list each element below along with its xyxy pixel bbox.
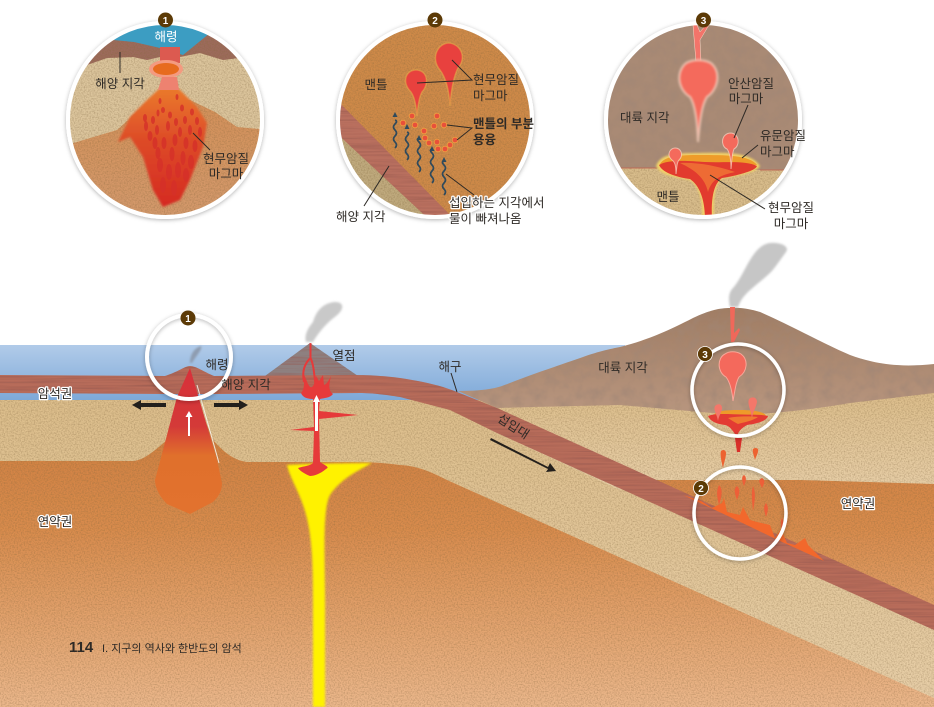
oceanic mantle: [342, 138, 424, 214]
oceanic crust leader: [119, 52, 121, 73]
basaltic leader: [710, 175, 765, 209]
small drops: [714, 397, 757, 421]
small drop: [406, 70, 427, 116]
water leader: [446, 174, 474, 195]
badge 1: 1: [163, 16, 169, 27]
plume: [118, 88, 207, 207]
crust boundary: [620, 168, 805, 170]
label: ridge: 해령: [154, 30, 178, 44]
label: partial melting of mantle: 맨틀의 부분: [473, 117, 534, 131]
badge 3: [696, 12, 711, 28]
vent and forks: [303, 343, 316, 388]
large drop: [719, 352, 746, 401]
badge 2: [428, 12, 442, 28]
hot spot yellow plume: [287, 463, 372, 707]
badge 2: 2: [432, 16, 438, 27]
label: ridge: 해령: [205, 358, 229, 372]
ring: [338, 23, 532, 217]
oceanic crust: [0, 366, 934, 630]
label: basaltic magma: 마그마: [209, 167, 244, 181]
andesitic leader: [734, 105, 748, 138]
label: basaltic magma: 현무암질: [473, 73, 519, 87]
label: oceanic crust: 해양 지각: [336, 210, 386, 224]
badge 3: 3: [702, 350, 708, 361]
label: basaltic magma: 현무암질: [768, 201, 814, 215]
neck, sills and base: [290, 398, 358, 476]
inset ring 3: [692, 344, 784, 436]
label: asthenosphere right: 연약권: [841, 496, 875, 511]
basaltic drops: [406, 43, 462, 116]
partial melt dots: [400, 113, 458, 152]
panel: plate tectonic cross-section: [0, 243, 934, 707]
inset circle 3 magma: [708, 352, 768, 452]
large drop: [435, 43, 462, 106]
rhyolite magma: [660, 155, 757, 165]
mantle: [622, 168, 784, 215]
label: continental crust: 대륙 지각: [620, 111, 670, 125]
badge 3: [698, 346, 712, 362]
inset 1 artwork: [70, 25, 260, 215]
basaltic magma leaders: [417, 60, 472, 83]
inset ring 2: [694, 467, 786, 559]
oceanic lithosphere mantle: [0, 385, 934, 698]
asthenosphere: [73, 100, 260, 215]
label: basaltic magma: 마그마: [774, 217, 809, 231]
inset 3 artwork: [608, 25, 798, 215]
label: andesitic magma: 마그마: [729, 92, 764, 106]
label: hot spot: 열점: [332, 349, 356, 363]
label: trench: 해구: [438, 360, 462, 374]
badge 1: [180, 310, 196, 326]
white arrow: ridge upwelling: [186, 411, 192, 436]
inset ring 1: [147, 315, 231, 399]
inset 2 artwork: [340, 25, 530, 215]
basaltic magma leader: [193, 133, 210, 150]
ridge smoke: [190, 346, 201, 363]
label: basaltic magma: 현무암질: [203, 152, 249, 166]
label: asthenosphere left: 연약권: [38, 514, 72, 529]
white arrow: hot spot upwelling: [313, 395, 320, 431]
water arrows: [392, 112, 446, 195]
ring: [68, 23, 262, 217]
label: mantle: 맨틀: [364, 78, 388, 92]
branching head: [301, 372, 333, 399]
conduit branch: [693, 25, 709, 62]
sea: [0, 345, 625, 400]
page number: 114: [69, 639, 94, 656]
large drop: [679, 60, 718, 142]
magma chamber core: [153, 63, 179, 75]
hot spot volcano smoke: [305, 302, 342, 342]
conduit lower: [158, 77, 179, 90]
badge 2: 2: [698, 484, 704, 495]
badge 1: 1: [185, 314, 191, 325]
label: rhyolitic magma: 유문암질: [760, 129, 806, 143]
partial melting leaders: [447, 125, 472, 140]
chamber glow: [656, 153, 760, 217]
basalt chamber: [659, 161, 757, 220]
melt drops: [717, 475, 784, 532]
continental magma conduit: [730, 307, 740, 342]
label: basaltic magma: 마그마: [473, 89, 508, 103]
seawater: [114, 25, 208, 55]
rhyolite magma top: [714, 410, 766, 416]
feeder stem: [735, 438, 742, 452]
asthenosphere layer: [0, 385, 934, 707]
right spreading arrow: [214, 400, 248, 410]
label: andesitic magma: 안산암질: [728, 77, 774, 91]
oceanic crust band: [340, 104, 449, 215]
panel: inset 1 mid-ocean ridge: [60, 12, 270, 225]
plume edge highlight: [197, 385, 219, 463]
oceanic crust leader: [364, 166, 389, 206]
running footer: I. 지구의 역사와 한반도의 암석: [102, 642, 242, 655]
label: subduction zone: 섭입대: [495, 411, 531, 442]
rhyolitic leader: [742, 145, 758, 158]
continental crust: [458, 308, 934, 415]
basalt chamber: [708, 414, 768, 437]
melt pockets: [143, 94, 202, 180]
small drop: [669, 148, 682, 174]
label: oceanic crust: 해양 지각: [95, 77, 145, 91]
hot spot volcano: [265, 343, 358, 376]
panel: inset 3 continental magma: [600, 12, 814, 231]
hot spot magma conduit system: [290, 343, 358, 476]
badge 2: [694, 480, 708, 496]
subduction arrow: [490, 438, 556, 472]
ring: [606, 23, 800, 217]
continental volcano smoke: [729, 243, 787, 307]
label: lithosphere: 암석권: [38, 387, 72, 401]
label: continental crust: 대륙 지각: [598, 361, 648, 375]
label: rhyolitic magma: 마그마: [760, 145, 795, 159]
left spreading arrow: [132, 400, 166, 410]
label: water released: 섭입하는 지각에서: [449, 196, 544, 210]
label: mantle: 맨틀: [656, 190, 680, 204]
ridge magma plume: [155, 368, 222, 514]
orange streak: [728, 416, 758, 424]
oceanic crust: [88, 35, 238, 65]
label: water released: 물이 빠져나옴: [449, 212, 521, 226]
label: oceanic crust: 해양 지각: [221, 378, 271, 392]
trench leader: [451, 373, 457, 392]
label: partial melting of mantle: 용융: [473, 133, 496, 147]
subduction melt: [683, 495, 824, 561]
magma chamber: [149, 60, 183, 78]
badge 1: [158, 12, 173, 28]
panel: inset 2 subduction melting: [330, 12, 544, 226]
rising magma drops: [721, 448, 758, 468]
orange magma streak: [680, 163, 735, 192]
badge 3: 3: [701, 16, 707, 27]
andesitic drop: [722, 133, 738, 169]
continental lithosphere mantle: [470, 385, 934, 490]
conduit upper: [160, 47, 180, 63]
